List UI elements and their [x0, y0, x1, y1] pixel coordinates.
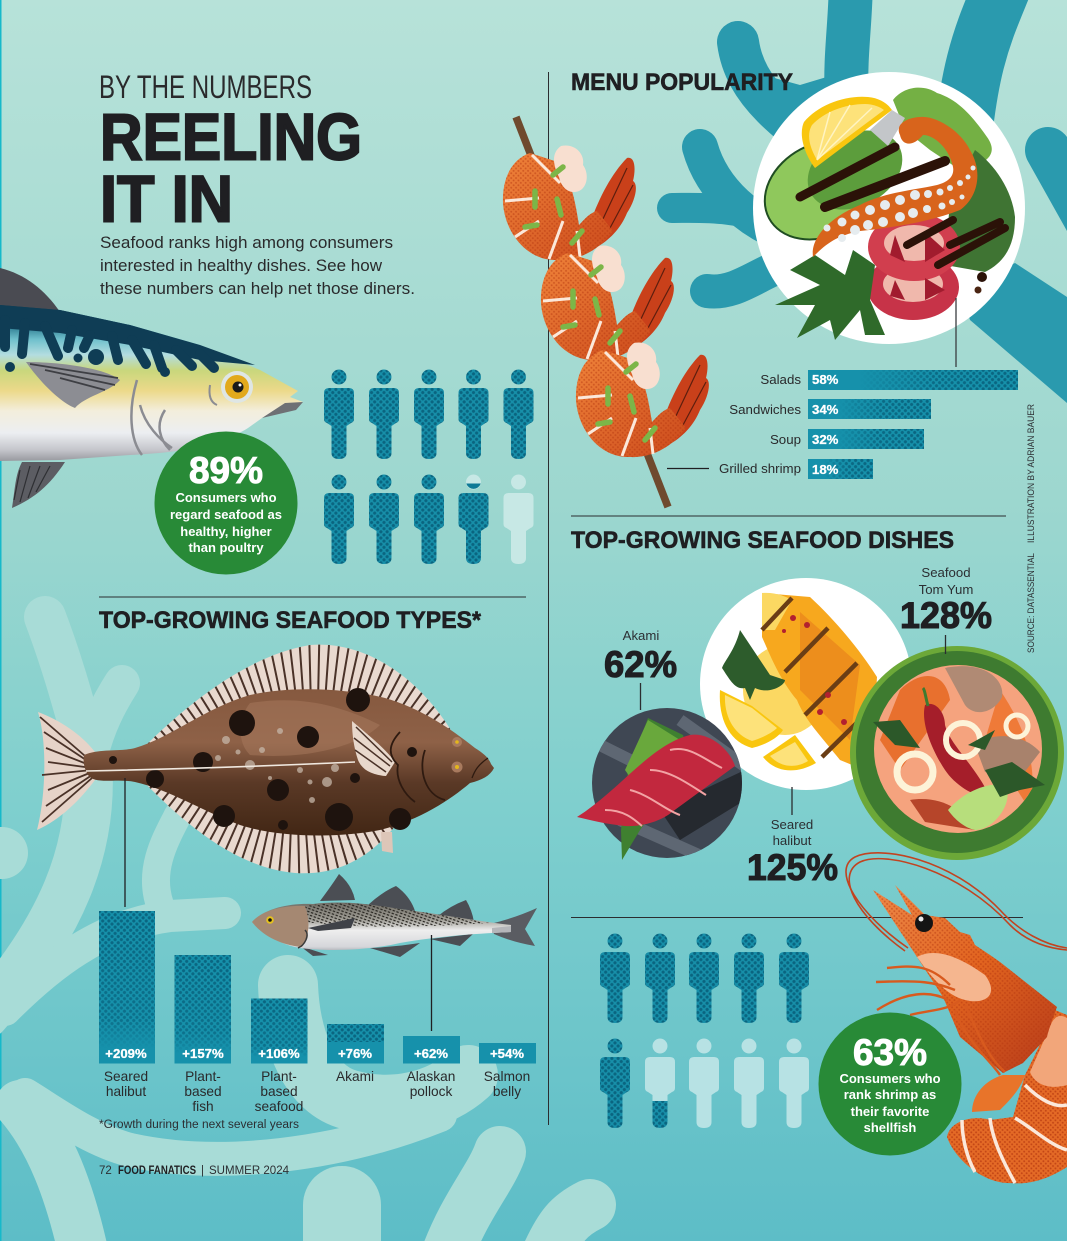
callout: 63 percent — [818, 1012, 962, 1156]
headline line 2: IT IN — [100, 162, 233, 236]
bar category labels: Alaskan — [407, 1069, 455, 1084]
heading: top-growing seafood types: TOP-GROWING SEAFOOD TYPES* — [99, 607, 482, 634]
bar chart: seafood types — [99, 911, 536, 1114]
credits — [1026, 404, 1037, 653]
callout: 63 percent: shellfish — [864, 1120, 916, 1135]
stat: seafood tom yum: Seafood — [921, 565, 971, 580]
icon: halibut — [37, 645, 494, 873]
callout: 63 percent: their favorite — [851, 1104, 929, 1119]
icon: halibut plate — [700, 578, 912, 790]
stat: seafood tom yum — [900, 565, 992, 654]
bar values — [812, 372, 839, 477]
stat: seafood tom yum: Tom Yum — [919, 582, 973, 597]
stat: seared halibut — [747, 787, 838, 888]
bar category labels: Salmon — [484, 1069, 530, 1084]
bar category labels: seafood — [255, 1099, 303, 1114]
headline line 1: REELING — [100, 100, 362, 174]
bar values: +54% — [490, 1046, 524, 1061]
background splash: light bottom left — [0, 617, 590, 1241]
icon: pollock — [252, 874, 537, 957]
divider lines — [99, 72, 1006, 1125]
stat: akami: Akami — [623, 628, 659, 643]
heading: menu popularity: MENU POPULARITY — [571, 69, 793, 96]
stat: seafood tom yum: 128% — [900, 595, 992, 636]
bar values: +62% — [414, 1046, 448, 1061]
callout: 89 percent — [154, 432, 298, 574]
bar values: +157% — [182, 1046, 224, 1061]
bar values: +76% — [338, 1046, 372, 1061]
credits: ILLUSTRATION BY ADRIAN BAUER — [1026, 404, 1037, 543]
bar values: 34% — [812, 402, 839, 417]
callout: 63 percent: rank shrimp as — [844, 1087, 936, 1102]
title block — [99, 69, 415, 298]
bar category labels: based — [184, 1084, 222, 1099]
callout: 89 percent: Consumers who — [175, 490, 277, 505]
stat: akami — [604, 628, 677, 710]
icon: tom yum bowl — [850, 646, 1064, 860]
connector: salad to bar — [955, 298, 957, 367]
intro text: interested in healthy dishes. See how — [100, 256, 383, 275]
intro text — [100, 233, 415, 298]
credits: SOURCE: DATASSENTIAL — [1026, 553, 1037, 653]
bar category labels: Akami — [336, 1069, 374, 1084]
heading: top-growing seafood dishes: TOP-GROWING SEAFOOD DISHES — [571, 527, 954, 554]
bar category labels: Seared — [104, 1069, 148, 1084]
bar category labels — [104, 1069, 530, 1114]
bar values: +209% — [105, 1046, 147, 1061]
footnote: *Growth during the next several years — [99, 1119, 299, 1131]
bar category labels: pollock — [410, 1084, 452, 1099]
bar category labels: halibut — [106, 1084, 146, 1099]
callout: 89 percent: regard seafood as — [170, 507, 282, 522]
connector lines: fish to bars — [125, 778, 432, 1031]
stat: seared halibut: Seared — [771, 817, 813, 832]
bar category labels: based — [260, 1084, 298, 1099]
divider line — [571, 916, 1023, 918]
background splash: teal top right — [672, 0, 1067, 403]
callout: 63 percent: 63% — [853, 1032, 927, 1073]
bar values: +106% — [258, 1046, 300, 1061]
icon: salad plate — [747, 72, 1025, 344]
callout: 89 percent: 89% — [189, 450, 263, 491]
footer: 72 — [99, 1165, 112, 1177]
callout: 89 percent: than poultry — [188, 540, 264, 555]
bar labels — [719, 372, 801, 476]
pictogram: 89 percent people — [324, 370, 534, 564]
stat: seared halibut: 125% — [747, 847, 838, 888]
bar category labels: fish — [192, 1099, 214, 1114]
bar values: 32% — [812, 432, 839, 447]
bar category labels: Plant- — [261, 1069, 297, 1084]
connector: shrimp to bar — [667, 468, 709, 470]
bar values: 18% — [812, 462, 839, 477]
intro text: these numbers can help net those diners. — [100, 279, 415, 298]
bar chart: menu popularity — [719, 370, 1018, 479]
bar labels: Sandwiches — [729, 402, 801, 417]
stat: akami: 62% — [604, 644, 677, 685]
intro text: Seafood ranks high among consumers — [100, 233, 393, 252]
footer: SUMMER 2024 — [209, 1165, 290, 1177]
bar category labels: Plant- — [185, 1069, 221, 1084]
bar labels: Grilled shrimp — [719, 461, 801, 476]
footer: FOOD FANATICS — [118, 1165, 196, 1177]
footer: | — [201, 1165, 204, 1177]
bar labels: Soup — [770, 432, 801, 447]
pictogram: 63 percent people — [600, 934, 809, 1128]
stat: seared halibut: halibut — [773, 833, 812, 848]
bar values: 58% — [812, 372, 839, 387]
bar category labels: belly — [493, 1084, 521, 1099]
footer — [99, 1165, 290, 1177]
icon: large shrimp — [846, 853, 1067, 1183]
kicker: BY THE NUMBERS — [99, 69, 312, 105]
callout: 89 percent: healthy, higher — [180, 524, 272, 539]
icon: akami plate — [577, 708, 750, 860]
bar labels: Salads — [760, 372, 801, 387]
icon: mackerel — [0, 268, 303, 508]
icon: shrimp skewer — [503, 117, 709, 507]
callout: 63 percent: Consumers who — [839, 1071, 941, 1086]
bar values — [105, 1046, 524, 1061]
